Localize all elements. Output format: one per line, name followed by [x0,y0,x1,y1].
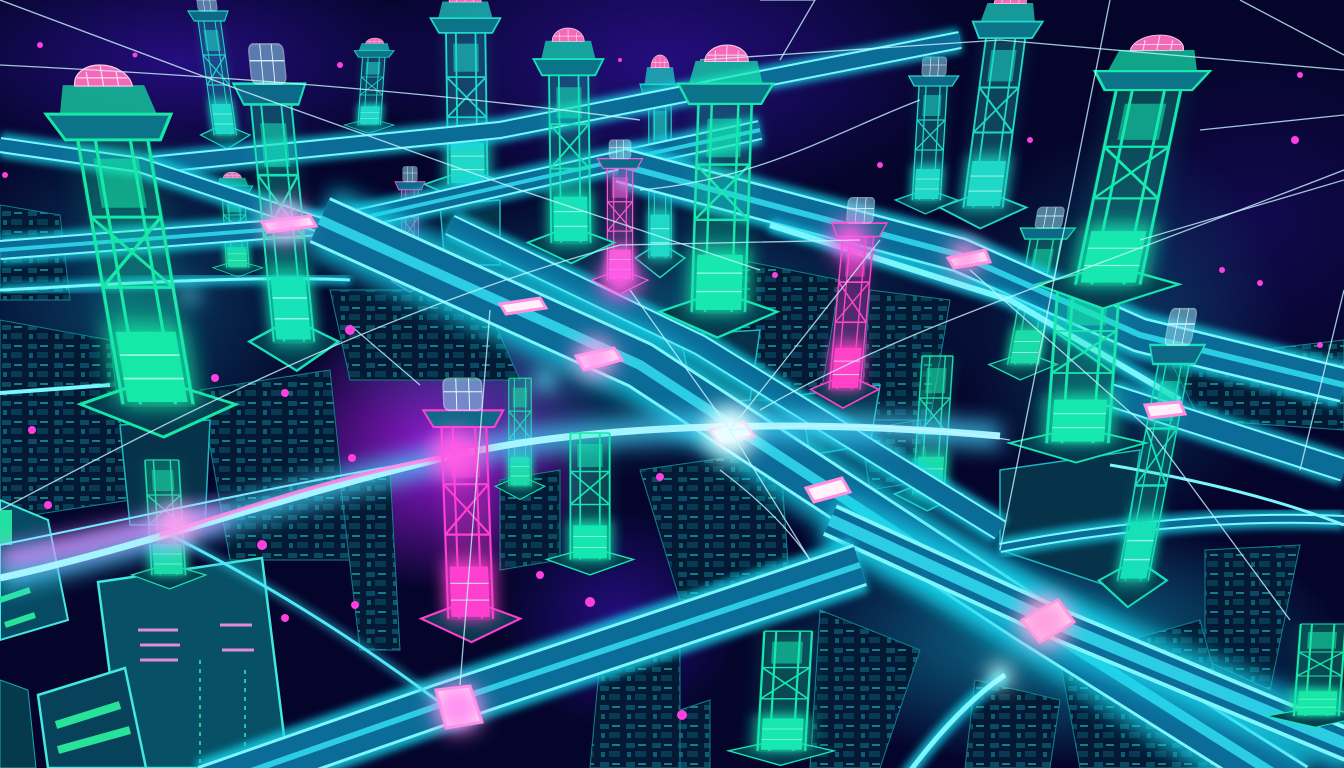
tower: green tower mid [547,433,633,575]
tower: magenta tower centre [413,378,521,642]
background towers [125,0,1086,589]
main diagonal road [320,220,1295,768]
building: left edge [0,500,68,640]
road: left entry deck [0,145,320,225]
tower: bottom centre [728,631,841,765]
right curved conduit [1000,465,1344,548]
tower: large right lower [1008,282,1157,463]
tower: slim magenta tower [592,140,648,294]
road: right lower deck [1110,395,1344,470]
tower: large centre [659,45,786,338]
building: bottom-left corner [0,668,146,768]
road: upper horizontal deck [150,40,960,165]
tower: top centre [525,28,615,263]
under-city dark blocks [0,205,1344,768]
junction glows [155,202,1071,732]
left conduit to lower hub [170,535,450,710]
tower base blocks [120,200,1140,590]
tower: large left [22,65,241,437]
tower: large right [1031,35,1231,308]
curved light conduit crossing the city [0,426,1000,578]
tower: left second [221,44,341,371]
tower: magenta tower right of centre [809,198,896,408]
lower left rising road [205,565,860,768]
road: left mid deck [0,130,760,250]
junction pads [262,216,1185,728]
road: upper right second deck [770,225,1180,400]
second diagonal road, bottom right [830,520,1344,750]
building: lower-left block [98,558,288,768]
tower: bottom right [1266,624,1344,727]
parallel diagonal road, centre [450,225,1000,530]
bottom right spur [905,675,1005,768]
tower: right small [1094,309,1218,607]
road: thin left connector [0,279,350,393]
road: upper right deck [620,165,1344,385]
